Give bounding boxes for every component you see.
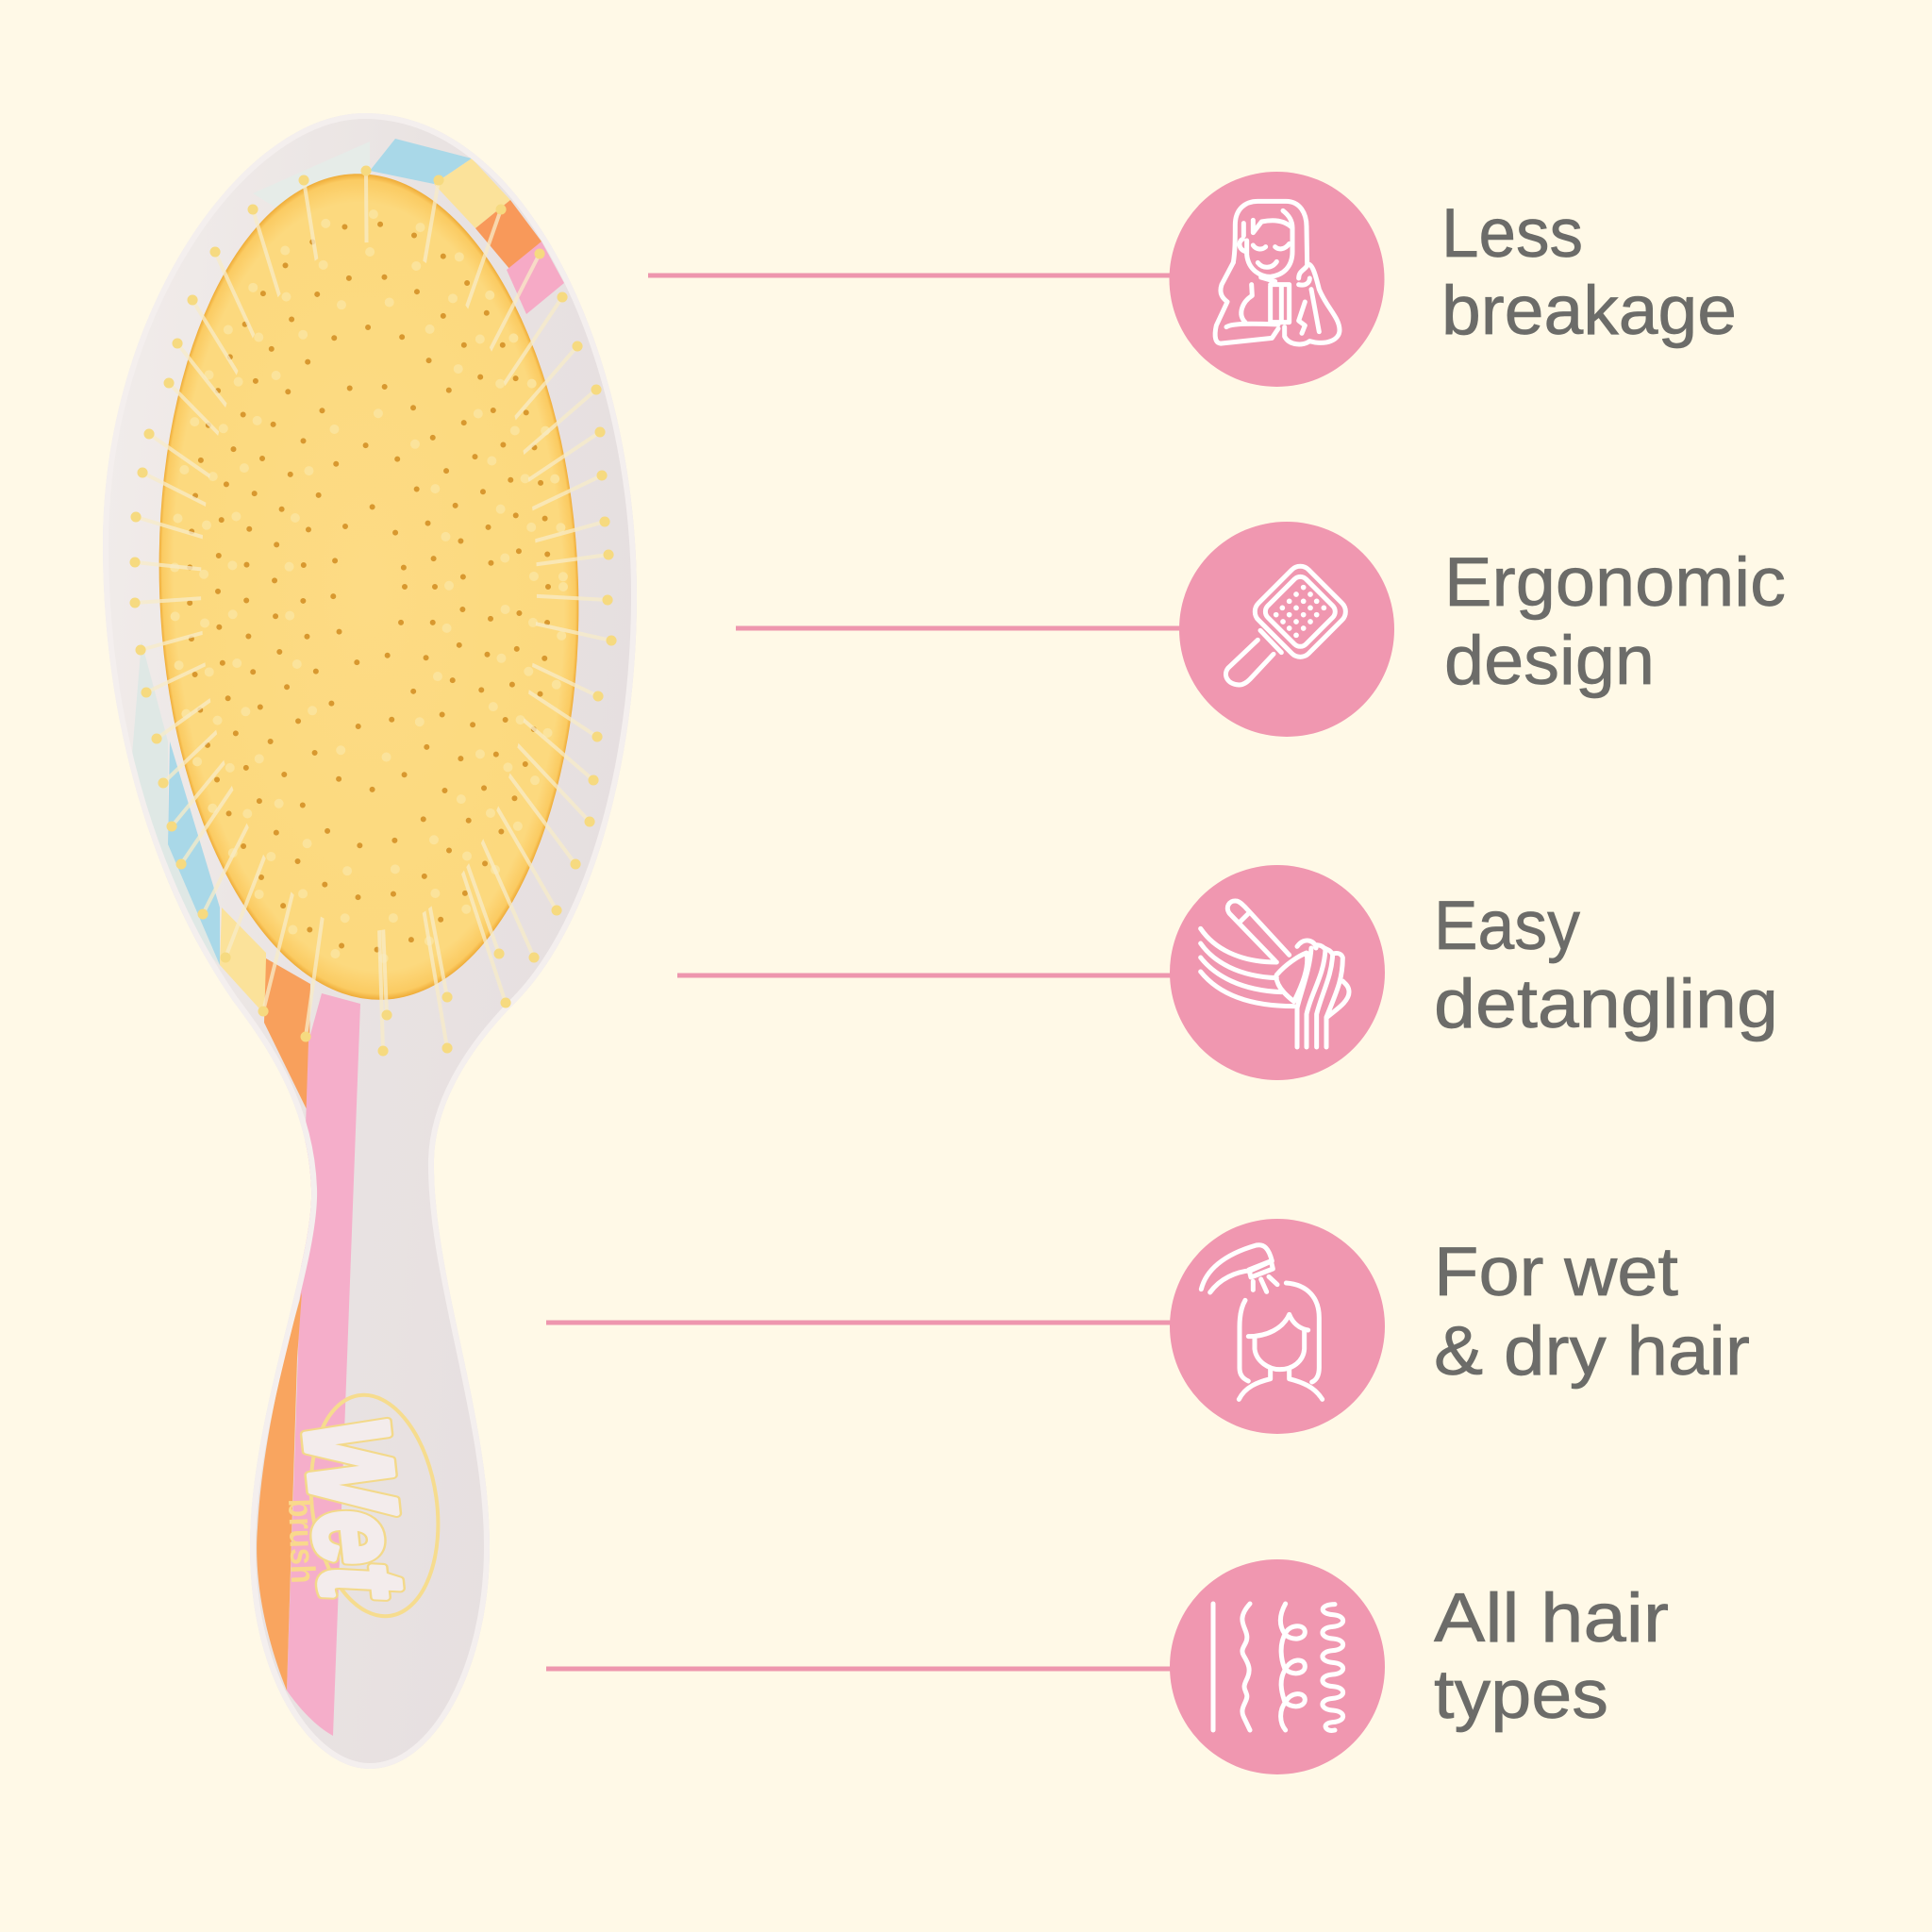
circle badge [1170,172,1385,387]
brand logo: Wet [277,1411,431,1607]
colour stripes on brush [132,139,564,1736]
connector line [648,274,1176,277]
label text: detangling [1434,966,1778,1042]
circle badge [1179,522,1394,737]
label text: Easy [1434,888,1580,964]
label text: Less [1441,195,1583,272]
yellow cushion pad [145,167,592,1007]
icon: woman brushing hair [1215,201,1340,344]
circle badge [1170,1219,1385,1434]
benefit row: ergonomic design [736,522,1786,737]
label text: breakage [1441,273,1737,349]
circle badge [1170,865,1385,1080]
brush rim highlight [103,113,637,1769]
hairbrush illustration [103,113,637,1769]
connector line [736,626,1184,630]
label text: & dry hair [1434,1313,1750,1390]
connector line [546,1666,1178,1672]
icon: hand holding hair strands [1201,901,1349,1047]
benefit row: easy detangling [677,865,1778,1080]
label text [1444,544,1786,699]
icon: four hair textures [1213,1604,1343,1730]
outer bristle pins [135,171,611,1051]
label text [1434,1234,1750,1390]
brush body [103,113,637,1769]
label text [1441,195,1737,349]
benefit row: all hair types [546,1559,1669,1774]
brand logo: Wet [277,1411,431,1607]
icon: shower over woman's head [1201,1245,1323,1399]
outer bristle tips [135,171,611,1051]
label text [1434,888,1778,1042]
connector line [546,1321,1178,1324]
icon: paddle brush [1225,561,1351,685]
inner bristle tips [175,214,563,959]
benefit row: for wet and dry hair [546,1219,1750,1434]
label text [1434,1580,1669,1733]
label text: All hair [1434,1580,1669,1657]
connector line [677,974,1177,977]
circle badge [1170,1559,1385,1774]
label text: For wet [1434,1234,1678,1310]
cushion holes [190,224,548,950]
benefit row: less breakage [648,172,1737,387]
label text: Ergonomic [1444,544,1786,621]
brand logo: brush [281,1498,323,1584]
label text: types [1434,1657,1608,1733]
label text: design [1444,623,1655,699]
